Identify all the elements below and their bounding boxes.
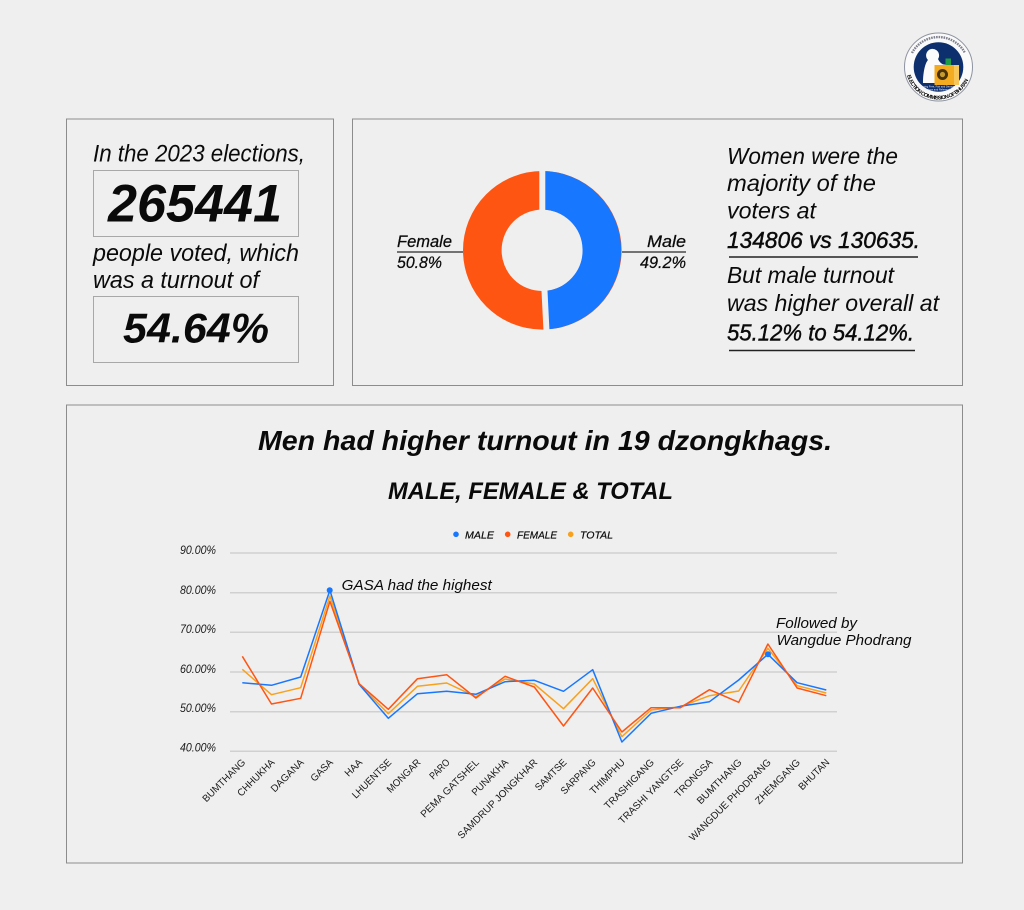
x axis labels: TRASHIGANG [602, 757, 657, 812]
text: male turnout: was higher overall at [727, 290, 940, 316]
panel: total votes and turnout [66, 119, 334, 386]
label: male share: Male [647, 233, 686, 251]
label: female share: 50.8% [397, 254, 442, 272]
turnout description: was a turnout of [93, 267, 261, 294]
text: women majority [727, 143, 920, 257]
panel: turnout by dzongkhag [66, 405, 962, 863]
callout: Gasa highest: GASA had the highest [342, 577, 493, 594]
heading: Men had higher turnout in 19 dzongkhags. [258, 425, 832, 456]
x axis labels: SAMTSE [533, 757, 570, 793]
text: women majority: majority of the [727, 170, 876, 196]
x axis labels: BHUTAN [797, 757, 832, 793]
legend: MALE [465, 529, 495, 541]
label: female share [397, 233, 463, 272]
intro text: In the 2023 elections, [93, 140, 305, 168]
label: female share: Female [397, 233, 452, 251]
x axis labels: MONGAR [385, 757, 423, 796]
x axis labels: TRASHI YANGTSE [617, 757, 686, 827]
x axis labels: WANGDUE PHODRANG [687, 757, 774, 844]
logo: Election Commission of Bhutan [904, 32, 973, 102]
x axis labels: DAGANA [269, 757, 307, 795]
logo: Election Commission of Bhutan: Elections and Referendums [923, 88, 955, 92]
x axis labels: GASA [309, 757, 336, 784]
y axis labels: 40.00% [180, 742, 216, 754]
x axis labels [201, 757, 832, 844]
x axis labels: CHHUKHA [236, 757, 278, 799]
callout: Wangdue Phodrang [776, 615, 912, 649]
stat box: turnout [94, 296, 298, 362]
text: male turnout: 55.12% to 54.12%. [727, 320, 914, 346]
x axis labels: SAMDRUP JONGKHAR [456, 757, 540, 841]
callout: Wangdue Phodrang: Wangdue Phodrang [776, 632, 912, 649]
y axis labels [180, 545, 216, 754]
marker: Gasa [327, 587, 333, 593]
x axis labels: PUNAKHA [470, 757, 511, 798]
logo: Election Commission of Bhutan: ELECTION COMMISSION OF BHUTAN [907, 74, 968, 100]
marker: Wangdue Phodrang [765, 651, 771, 657]
y axis labels: 90.00% [180, 545, 216, 557]
panel: voters by gender [352, 119, 962, 386]
x axis labels: THIMPHU [588, 757, 628, 797]
y axis labels: 60.00% [180, 664, 216, 676]
logo: Election Commission of Bhutan: Ensuring Free, Fair and Democratic [918, 84, 960, 88]
donut chart [482, 168, 602, 333]
series: female [242, 601, 826, 732]
text: women majority: voters at [727, 198, 817, 224]
x axis labels: LHUENTSE [350, 757, 394, 801]
y axis labels: 70.00% [180, 624, 216, 636]
x axis labels: PEMA GATSHEL [419, 757, 482, 820]
text: women majority: 134806 vs 130635. [727, 227, 920, 253]
x axis labels: BUMTHANG [695, 757, 745, 807]
legend: TOTAL [580, 529, 613, 541]
legend: FEMALE [517, 529, 558, 541]
stat box: votes cast: 265441 [107, 174, 282, 234]
stat box: turnout: 54.64% [123, 304, 269, 352]
y axis labels: 80.00% [180, 585, 216, 597]
x axis labels: PARO [428, 757, 453, 782]
line chart [180, 545, 837, 844]
text: male turnout: But male turnout [727, 262, 895, 288]
legend [453, 529, 613, 541]
text: male turnout [727, 262, 940, 350]
y axis labels: 50.00% [180, 703, 216, 715]
turnout description [92, 240, 299, 294]
x axis labels: BUMTHANG [201, 757, 248, 805]
label: male share: 49.2% [640, 254, 686, 272]
x axis labels: HAA [343, 757, 365, 779]
series: total [242, 596, 826, 737]
turnout description: people voted, which [92, 240, 299, 267]
text: women majority: Women were the [727, 143, 898, 169]
chart title: MALE, FEMALE & TOTAL [388, 478, 673, 505]
x axis labels: ZHEMGANG [753, 757, 803, 807]
series: male [242, 590, 826, 742]
callout: Wangdue Phodrang: Followed by [776, 615, 859, 632]
label: male share [622, 233, 686, 272]
x axis labels: TRONGSA [673, 757, 716, 800]
x axis labels: SARPANG [559, 757, 599, 797]
